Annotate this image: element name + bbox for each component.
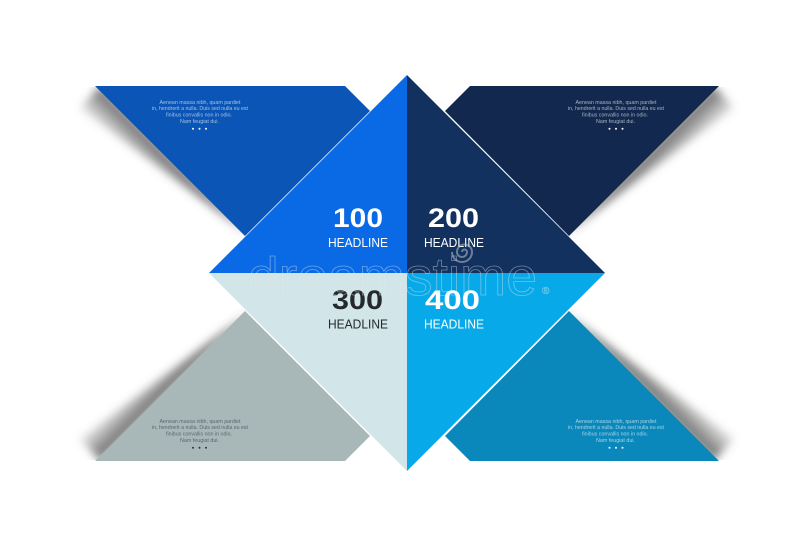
shape: 200 triangle <box>407 75 605 273</box>
icon: top-left dots <box>192 128 207 130</box>
text block: bottom-right body copy <box>568 419 665 444</box>
text block: top-left body copy: Nam feugiat dui. <box>180 119 219 125</box>
shadow: top-right <box>564 86 734 236</box>
shadow: bottom-right <box>564 311 734 461</box>
panel: top-left back triangle <box>80 86 370 236</box>
shape: 300 triangle <box>209 273 407 471</box>
text block: bottom-right body copy: in, hendrerit a nulla. Duis sed nulla eu est <box>568 425 665 431</box>
text block: top-left body copy: in, hendrerit a nulla. Duis sed nulla eu est <box>152 106 249 112</box>
panel: 400 front triangle <box>407 273 605 471</box>
shape: 100 triangle <box>209 75 407 273</box>
text block: bottom-right body copy: finibus convallis non in odio. <box>582 432 648 438</box>
watermark <box>248 245 550 307</box>
text block: top-left body copy: finibus convallis non in odio. <box>166 112 232 118</box>
panel: 100 front triangle <box>209 75 407 273</box>
icon: bottom-right dots <box>608 447 624 449</box>
infographic <box>80 75 734 471</box>
text block: top-right body copy: in, hendrerit a nulla. Duis sed nulla eu est <box>568 106 665 112</box>
text block: bottom-left body copy: finibus convallis non in odio. <box>166 432 232 438</box>
text block: bottom-left body copy: Nam feugiat dui. <box>180 438 219 444</box>
watermark registered mark: ® <box>542 286 550 297</box>
text block: bottom-left body copy: in, hendrerit a nulla. Duis sed nulla eu est <box>152 425 249 431</box>
panel: bottom-left back triangle <box>80 311 370 461</box>
text block: bottom-right body copy: Aenean massa nibh, quam pardiet <box>576 419 657 425</box>
heading: 300 headline: HEADLINE <box>328 318 388 332</box>
shape: bottom-right fold <box>445 311 719 461</box>
text block: bottom-right body copy: Nam feugiat dui. <box>596 438 635 444</box>
text block: top-right body copy: Aenean massa nibh, quam pardiet <box>576 100 657 106</box>
heading: 400 headline: HEADLINE <box>424 318 484 332</box>
panel: 300 front triangle <box>209 273 407 471</box>
shape: top-left fold <box>95 86 370 236</box>
icon: bottom-left dots <box>192 447 207 449</box>
text block: bottom-left body copy <box>152 419 249 444</box>
panel: bottom-right back triangle <box>445 311 734 461</box>
icon: top-right dots <box>608 128 624 130</box>
number: 200: 200 <box>428 203 479 233</box>
text block: bottom-left body copy: Aenean massa nibh, quam pardiet <box>160 419 241 425</box>
icon: watermark spiral <box>452 245 472 262</box>
text block: top-right body copy: finibus convallis non in odio. <box>582 112 648 118</box>
number: 300: 300 <box>332 285 383 315</box>
text block: top-right body copy <box>568 100 665 125</box>
shape: bottom-left fold <box>95 311 370 461</box>
number: 400: 400 <box>425 285 480 315</box>
heading: 200 headline: HEADLINE <box>424 236 484 250</box>
shape: 400 triangle <box>407 273 605 471</box>
panel: 200 front triangle <box>407 75 605 273</box>
shape: top-right fold <box>445 86 719 236</box>
shadow: bottom-left <box>80 311 250 461</box>
panel: top-right back triangle <box>445 86 734 236</box>
text block: top-right body copy: Nam feugiat dui. <box>596 119 635 125</box>
watermark text: dreamstime <box>248 247 537 307</box>
number: 100: 100 <box>333 203 383 233</box>
heading: 100 headline: HEADLINE <box>328 236 388 250</box>
shadow: top-left <box>80 86 250 236</box>
text block: top-left body copy <box>152 100 249 125</box>
text block: top-left body copy: Aenean massa nibh, quam pardiet <box>160 100 241 106</box>
